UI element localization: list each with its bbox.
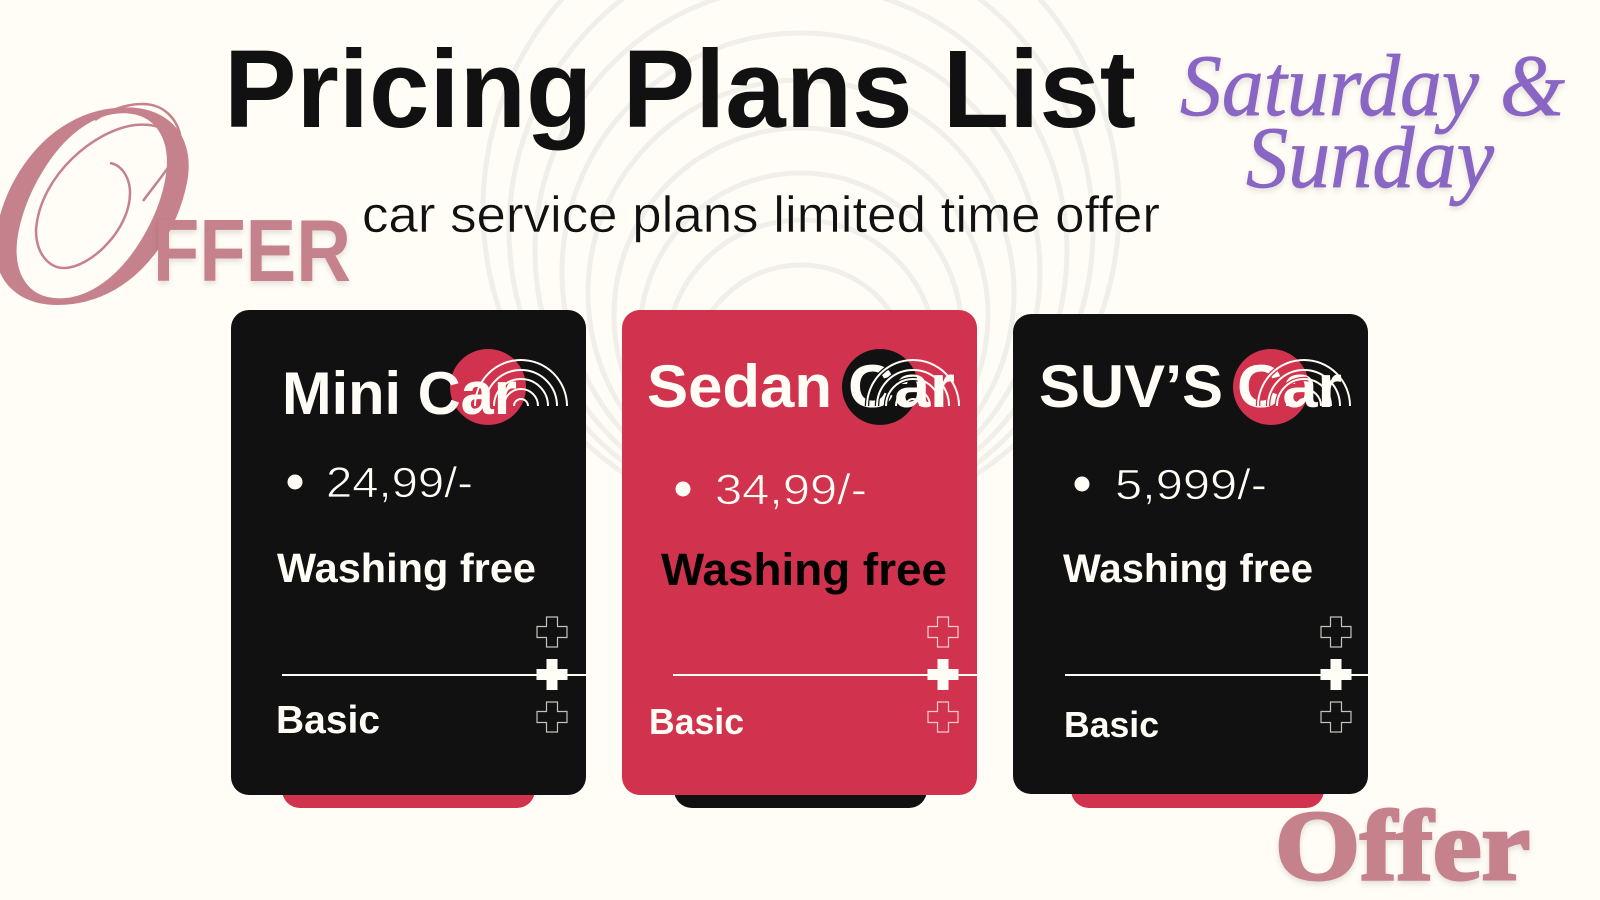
price — [676, 466, 867, 514]
card background — [231, 310, 586, 795]
title: Pricing Plans List — [224, 28, 1136, 151]
feature text: Washing free — [1063, 547, 1313, 591]
divider and plus icons — [282, 617, 586, 732]
divider and plus icons — [1065, 617, 1368, 732]
plan name: SUV’S — [1039, 353, 1223, 420]
red tab under card — [282, 770, 535, 808]
red tab under card — [1071, 770, 1324, 808]
feature text: Washing free — [277, 545, 536, 591]
badge: Saturday & Sunday — [1180, 38, 1566, 207]
card background — [1013, 314, 1368, 794]
icon: circle and inner arcs — [1233, 349, 1321, 425]
icon: outer rainbow arcs — [867, 360, 959, 406]
divider and plus icons — [673, 617, 977, 732]
badge: Saturday & Sunday: Saturday & — [1180, 38, 1566, 135]
badge: script Offer top left — [0, 35, 351, 371]
price — [1074, 461, 1267, 509]
background concentric rings — [483, 0, 1119, 527]
tier label: Basic — [1064, 704, 1159, 745]
feature text: Washing free — [661, 544, 947, 595]
plan name — [1039, 353, 1342, 420]
plan name — [647, 353, 955, 420]
black tab under card — [674, 770, 927, 808]
plan name: Sedan — [647, 353, 832, 420]
badge: script Offer top left: FFER — [153, 201, 351, 300]
panel: Sedan Car plan — [622, 310, 977, 808]
plan name: Car — [1237, 353, 1342, 420]
panel: SUV'S Car plan — [1013, 314, 1368, 808]
tier label: Basic — [649, 701, 744, 742]
price: 24,99/- — [326, 459, 473, 507]
card background — [622, 310, 977, 795]
plan name: Mini Car — [282, 360, 517, 427]
badge: Offer bottom right: Offer — [1275, 790, 1530, 900]
badge: Saturday & Sunday: Sunday — [1246, 110, 1495, 207]
icon: circle and inner arcs — [842, 349, 930, 425]
panel: Mini Car plan — [231, 310, 586, 808]
price: 5,999/- — [1115, 461, 1267, 509]
subtitle: car service plans limited time offer — [362, 186, 1160, 243]
icon: outer rainbow arcs — [1258, 360, 1350, 406]
price: 34,99/- — [715, 466, 867, 514]
icon: circle and rainbow arcs — [450, 349, 567, 425]
tier label: Basic — [276, 699, 380, 742]
plan name: Car — [848, 353, 955, 420]
